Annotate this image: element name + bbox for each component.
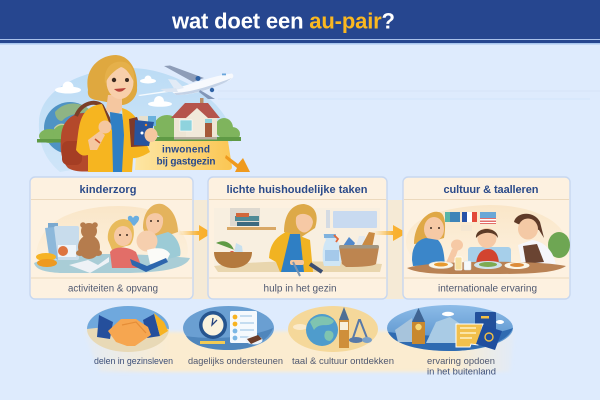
- hair back: [87, 55, 137, 105]
- window/appliance: [333, 211, 377, 228]
- icon: globe: [44, 102, 96, 154]
- hand gesture: [451, 240, 463, 250]
- label: delen in gezinsleven: delen in gezinsleven: [94, 356, 173, 366]
- illustration: family meal: [406, 205, 570, 274]
- callout: inwonend bij gastgezin: [135, 141, 232, 170]
- chocolate on plate: [246, 336, 262, 344]
- icon: airplane: [160, 66, 233, 99]
- bushes: [37, 115, 241, 143]
- girl: [108, 219, 134, 250]
- heading: cultuur & taalleren: [444, 184, 539, 196]
- label: taal & cultuur ontdekken: taal & cultuur ontdekken: [292, 356, 394, 367]
- teddy bear: [76, 222, 102, 259]
- child: [468, 247, 511, 266]
- panel: lichte huishoudelijke taken: [208, 177, 387, 299]
- right basket: [343, 237, 355, 249]
- cupboard with jars: [48, 223, 58, 229]
- connector band between cards: [192, 200, 404, 299]
- illustration: family reading: [34, 204, 190, 273]
- heart: [128, 216, 139, 226]
- caption: internationale ervaring: [438, 284, 537, 294]
- blue book: [130, 258, 168, 272]
- panel: kinderzorg: [30, 177, 193, 299]
- left basket: [216, 241, 240, 252]
- oranges: [36, 253, 56, 261]
- label: ervaring opdoen in het buitenland: in het buitenland: [427, 366, 496, 376]
- title: wat doet een au-pair?: [171, 8, 395, 34]
- jacket: [76, 104, 113, 172]
- icon: passport and tickets: [129, 116, 158, 147]
- arrow: orange down-right: [225, 155, 250, 172]
- baby: [136, 230, 158, 252]
- callout: inwonend bij gastgezin: bij gastgezin: [156, 156, 216, 168]
- sky bubble: [39, 68, 233, 172]
- table: [407, 262, 566, 274]
- label: ervaring opdoen in het buitenland: ervaring opdoen: [427, 355, 495, 366]
- backpack: [61, 103, 109, 172]
- illustration: housework: [214, 204, 382, 276]
- hero illustration: au-pair with plane and house: [37, 55, 600, 172]
- clock: [199, 311, 227, 339]
- clouds: [55, 76, 172, 107]
- icon: globe and landmarks: [288, 306, 378, 352]
- teacher: [514, 214, 544, 238]
- contrail: [138, 90, 172, 96]
- arrow: huishoudelijke taken to cultuur: [373, 225, 407, 241]
- arm and hand: [98, 120, 112, 134]
- mother: [143, 204, 178, 238]
- checklist: [230, 311, 257, 343]
- woman: [284, 204, 317, 238]
- plates: [429, 262, 453, 268]
- woman: [76, 55, 150, 172]
- icon: handshake: [87, 306, 169, 352]
- icon: clock and checklist: [183, 306, 274, 350]
- caption: activiteiten & opvang: [68, 284, 158, 294]
- fringe: [105, 62, 134, 84]
- header banner: [0, 0, 600, 44]
- panel: cultuur & taalleren: [403, 177, 570, 299]
- flags: [445, 212, 460, 222]
- spray bottle: [323, 234, 341, 266]
- arrow: kinderzorg to huishoudelijke taken: [178, 225, 212, 241]
- bottom band behind icons: [84, 331, 515, 372]
- icon: travel abroad city and passports: [387, 305, 513, 351]
- heading: kinderzorg: [80, 184, 136, 196]
- ticket: [456, 324, 483, 347]
- heading: lichte huishoudelijke taken: [226, 184, 368, 196]
- callout: inwonend bij gastgezin: inwonend: [162, 144, 210, 156]
- face: [106, 65, 134, 99]
- top: [110, 112, 131, 172]
- caption: hulp in het gezin: [264, 284, 336, 294]
- shelf with towels: [230, 208, 260, 226]
- label: dagelijks ondersteunen: dagelijks ondersteunen: [188, 356, 283, 366]
- woman: [414, 212, 445, 244]
- icon: house: [171, 98, 220, 140]
- buildings: [395, 318, 412, 342]
- passport front: [476, 325, 502, 350]
- neck: [106, 95, 122, 118]
- open book: [69, 257, 109, 273]
- plant: [548, 232, 570, 258]
- passport back: [475, 312, 496, 337]
- label: ervaring opdoen in het buitenland: [427, 355, 496, 376]
